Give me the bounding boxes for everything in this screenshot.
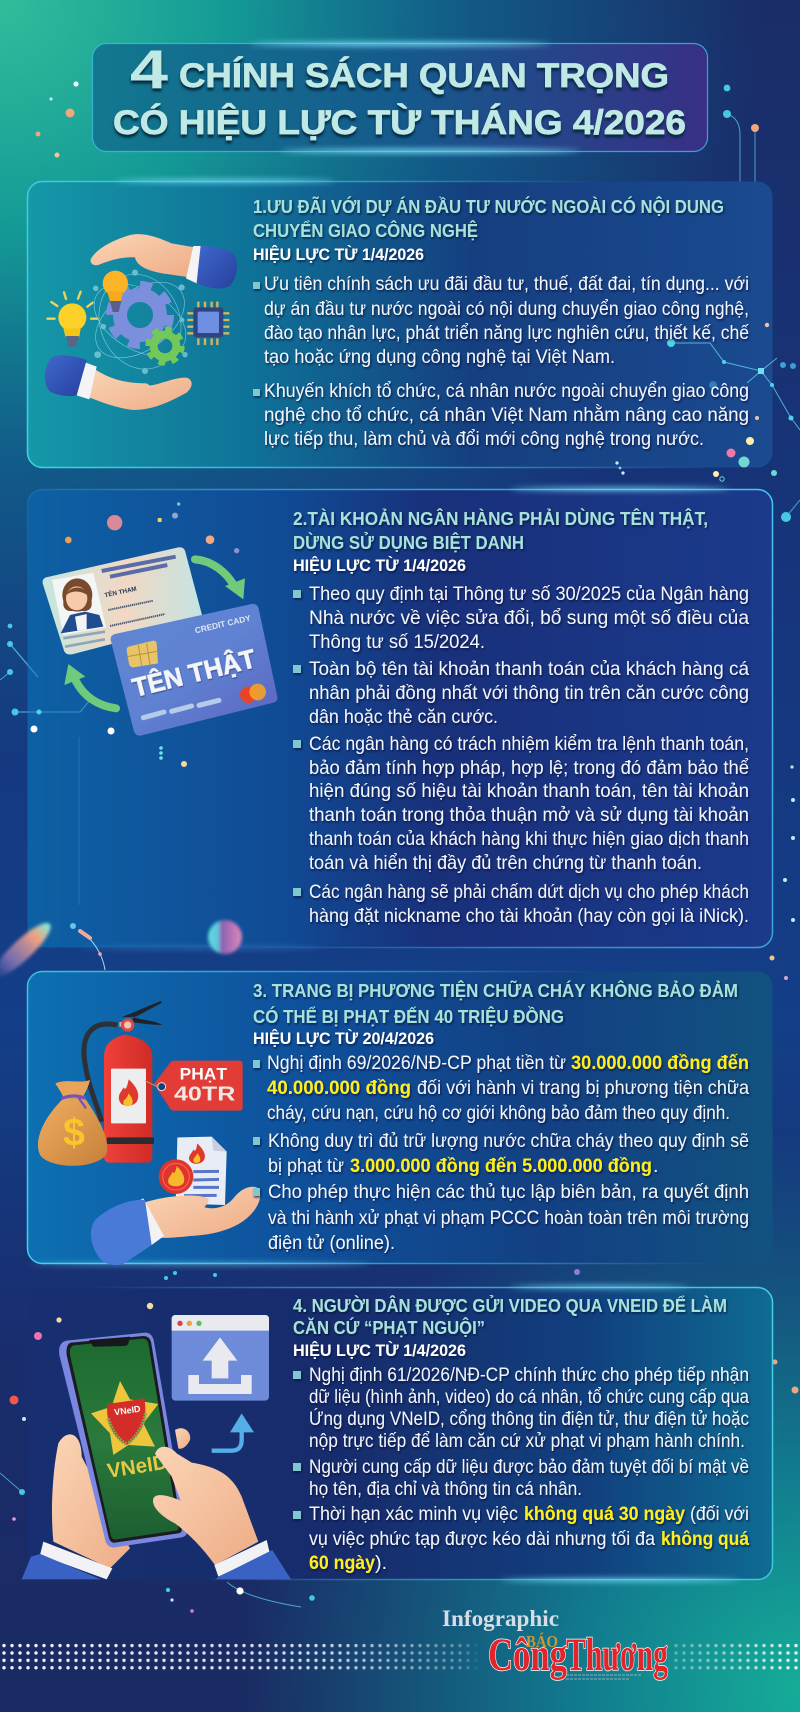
- body text: Ưu tiên chính sách ưu đãi đầu tư, thuế, đất đai, tín dụng... với: [264, 273, 749, 295]
- body text: Nhà nước về việc sửa đổi, bổ sung một số điều của: [309, 607, 749, 629]
- effective date: HIỆU LỰC TỪ 1/4/2026: [293, 556, 466, 575]
- heading: 2.TÀI KHOẢN NGÂN HÀNG PHẢI DÙNG TÊN THẬT,: [293, 508, 708, 529]
- body text: (đối với: [690, 1503, 749, 1525]
- upload window: [172, 1315, 269, 1401]
- title text: CÓ HIỆU LỰC TỪ THÁNG 4/2026: [113, 104, 686, 142]
- body text: lực tiếp thu, làm chủ và đổi mới công nghệ trong nước.: [264, 428, 704, 450]
- body text: Thông tư số 15/2024.: [309, 631, 485, 653]
- illustration: ID card and credit card: [43, 502, 277, 736]
- open hand: [91, 1187, 260, 1265]
- body text: [293, 583, 749, 927]
- VNeID star badge: [91, 1381, 158, 1455]
- body text: [253, 1052, 749, 1254]
- title text: 4: [130, 38, 169, 100]
- arc with nodes: [70, 923, 105, 970]
- body text: không quá 30 ngày: [524, 1503, 685, 1525]
- heading: [293, 508, 708, 553]
- body text: Cho phép thực hiện các thủ tục lập biên bản, ra quyết định: [268, 1181, 749, 1203]
- heading: DỪNG SỬ DỤNG BIỆT DANH: [293, 532, 524, 553]
- footer: Báo Công Thương logo: Công: [488, 1629, 567, 1681]
- right hand: [153, 1447, 258, 1565]
- credit card: [111, 604, 277, 736]
- heading: CHUYỂN GIAO CÔNG NGHỆ: [253, 220, 478, 241]
- dotted band: [2, 1644, 798, 1670]
- portrait: [61, 578, 103, 633]
- arrow: ID to card: [195, 559, 245, 599]
- body text: 40.000.000 đồng: [267, 1077, 411, 1099]
- panel 1: foreign investment with technology transfer: [28, 179, 800, 481]
- body text: ).: [375, 1552, 387, 1574]
- title text: [113, 38, 686, 142]
- footer: Báo Công Thương logo: BÁO: [526, 1632, 558, 1651]
- body text: tạo hoặc ứng dụng công nghệ tại Việt Nam.: [264, 346, 615, 368]
- body text: Nghị định 61/2026/NĐ-CP chính thức cho phép tiếp nhận: [309, 1364, 749, 1386]
- body text: họ tên, địa chỉ và thông tin cá nhân.: [309, 1478, 582, 1500]
- body text: nghệ cho tổ chức, cá nhân Việt Nam nhằm nâng cao năng: [264, 403, 749, 426]
- body text: Thời hạn xác minh vụ việc: [309, 1503, 518, 1525]
- body text: .: [653, 1155, 658, 1177]
- floating dots: [34, 1303, 153, 1340]
- sphere: [208, 920, 242, 954]
- body text: đào tạo nhân lực, phát triển năng lực nghiên cứu, thiết kế, chế: [264, 322, 749, 344]
- body text: bảo đảm tính hợp pháp, hợp lệ; trong đó đảm bảo thể: [309, 757, 749, 779]
- title panel: [92, 38, 708, 153]
- body text: bị phạt từ: [268, 1155, 344, 1177]
- right sleeve: [214, 1540, 291, 1579]
- effective date: HIỆU LỰC TỪ 20/4/2026: [253, 1029, 434, 1048]
- illustration: phone with VNeID and upload: [22, 1315, 291, 1579]
- effective date: HIỆU LỰC TỪ 1/4/2026: [253, 245, 424, 264]
- comet: [0, 917, 57, 983]
- panel 2: bank account real name: [10, 487, 772, 949]
- fine tag: 40TR: [174, 1082, 235, 1105]
- illustration: extinguisher, money bag, fine tag, hand: [38, 1001, 260, 1265]
- heading: [293, 1295, 727, 1338]
- chip: [127, 641, 158, 667]
- small gear: [148, 329, 182, 363]
- body text: và thi hành xử phạt vi phạm PCCC hoàn toàn trên môi trường: [268, 1207, 749, 1229]
- chip: [187, 302, 229, 345]
- heading: 3. TRANG BỊ PHƯƠNG TIỆN CHỮA CHÁY KHÔNG BẢO ĐẢM: [253, 980, 738, 1001]
- body text: nộp trực tiếp để làm căn cứ xử phạt vi phạm hành chính.: [309, 1430, 745, 1452]
- arrow: card to ID: [64, 664, 116, 708]
- body text: thanh toán của khách hàng khi thực hiện giao dịch thanh: [309, 828, 749, 850]
- back fingers: [175, 1428, 190, 1449]
- bottom hand: [45, 355, 192, 410]
- body text: Nghị định 69/2026/NĐ-CP phạt tiền từ: [267, 1052, 566, 1074]
- body text: [253, 273, 749, 450]
- body text: [293, 1364, 750, 1574]
- body text: vụ việc phức tạp được kéo dài nhưng tối đa: [309, 1528, 655, 1550]
- heading: [253, 196, 724, 241]
- body text: Không duy trì đủ trữ lượng nước chữa cháy theo quy định sẽ: [268, 1130, 749, 1152]
- footer: Infographic label: Infographic: [442, 1606, 559, 1631]
- body text: dự án đầu tư nước ngoài có nội dung chuyển giao công nghệ,: [264, 298, 749, 320]
- body text: điện tử (online).: [268, 1232, 395, 1254]
- credit card: TÊN THẬT: [129, 643, 259, 703]
- orange bulb: [103, 271, 128, 312]
- network overlay: [10, 644, 187, 905]
- title text: CHÍNH SÁCH QUAN TRỌNG: [179, 57, 669, 95]
- fine tag: [145, 1061, 243, 1111]
- body text: không quá: [661, 1528, 750, 1550]
- left sleeve: [22, 1542, 112, 1579]
- mastercard logo: [240, 684, 266, 703]
- body text: Các ngân hàng có trách nhiệm kiểm tra lệnh thanh toán,: [309, 733, 749, 755]
- money bag: [38, 1080, 107, 1166]
- phone: [59, 1333, 187, 1547]
- illustration: hands, gears, bulbs, chip: [45, 234, 237, 410]
- body text: Khuyến khích tổ chức, cá nhân nước ngoài chuyển giao công: [264, 380, 749, 402]
- effective date: HIỆU LỰC TỪ 1/4/2026: [293, 1341, 466, 1360]
- document: [176, 1137, 227, 1205]
- heading: 1.ƯU ĐÃI VỚI DỰ ÁN ĐẦU TƯ NƯỚC NGOÀI CÓ NỘI DUNG: [253, 196, 724, 217]
- body text: Toàn bộ tên tài khoản thanh toán của khách hàng cá: [309, 658, 749, 680]
- body text: toán và hiển thị đầy đủ trên chứng từ thanh toán.: [309, 852, 702, 874]
- fine tag: PHẠT: [180, 1064, 227, 1083]
- phone: VNeID: [106, 1451, 169, 1483]
- floating spheres: [65, 502, 239, 553]
- panel 4: VNeID video evidence: [22, 1286, 772, 1582]
- body text: 3.000.000 đồng đến 5.000.000 đồng: [350, 1155, 652, 1177]
- body text: cháy, cứu nạn, cứu hộ cơ giới không bảo đảm theo quy định.: [267, 1102, 730, 1124]
- blue arrow: [212, 1413, 254, 1451]
- heading: [253, 980, 738, 1027]
- body text: nhân phải đồng nhất với thông tin trên căn cước công: [309, 682, 749, 704]
- panel 3: fire equipment penalty: [28, 972, 772, 1265]
- body text: 60 ngày: [309, 1552, 375, 1574]
- VNeID star badge: VNeID: [114, 1404, 142, 1417]
- body text: hàng đặt nickname cho tài khoản (hay còn gọi là iNick).: [309, 905, 749, 927]
- yellow bulb: [47, 292, 97, 347]
- credit card: CREDIT CADY: [194, 613, 252, 635]
- ID card: [43, 547, 203, 655]
- heading: 4. NGƯỜI DÂN ĐƯỢC GỬI VIDEO QUA VNEID ĐỂ LÀM: [293, 1295, 727, 1316]
- body text: hiện đúng số hiệu tài khoản thanh toán, tên tài khoản: [309, 780, 749, 802]
- heading: CĂN CỨ “PHẠT NGUỘI”: [293, 1317, 485, 1338]
- body text: đối với hành vi trang bị phương tiện chữa: [417, 1077, 749, 1099]
- body text: 30.000.000 đồng đến: [571, 1052, 749, 1074]
- money bag: $: [63, 1111, 85, 1155]
- body text: dân hoặc thẻ căn cước.: [309, 706, 498, 728]
- top hand: [91, 234, 237, 288]
- fire extinguisher: [84, 1001, 163, 1163]
- heading: CÓ THỂ BỊ PHẠT ĐẾN 40 TRIỆU ĐỒNG: [253, 1006, 564, 1027]
- orbit lines: [82, 263, 198, 381]
- network overlay: [615, 323, 800, 481]
- big gear: [110, 285, 170, 345]
- body text: Theo quy định tại Thông tư số 30/2025 của Ngân hàng: [309, 583, 749, 605]
- body text: Các ngân hàng sẽ phải chấm dứt dịch vụ cho phép khách: [309, 881, 749, 903]
- left hand: [52, 1434, 130, 1568]
- ID card: TÊN THAM: [104, 584, 137, 599]
- fire seal: [159, 1159, 193, 1194]
- footer: Báo Công Thương logo: [488, 1629, 668, 1681]
- body text: thanh toán trong thỏa thuận mở và sử dụng tài khoản: [309, 804, 749, 826]
- footer: Báo Công Thương logo: Thương: [566, 1629, 668, 1681]
